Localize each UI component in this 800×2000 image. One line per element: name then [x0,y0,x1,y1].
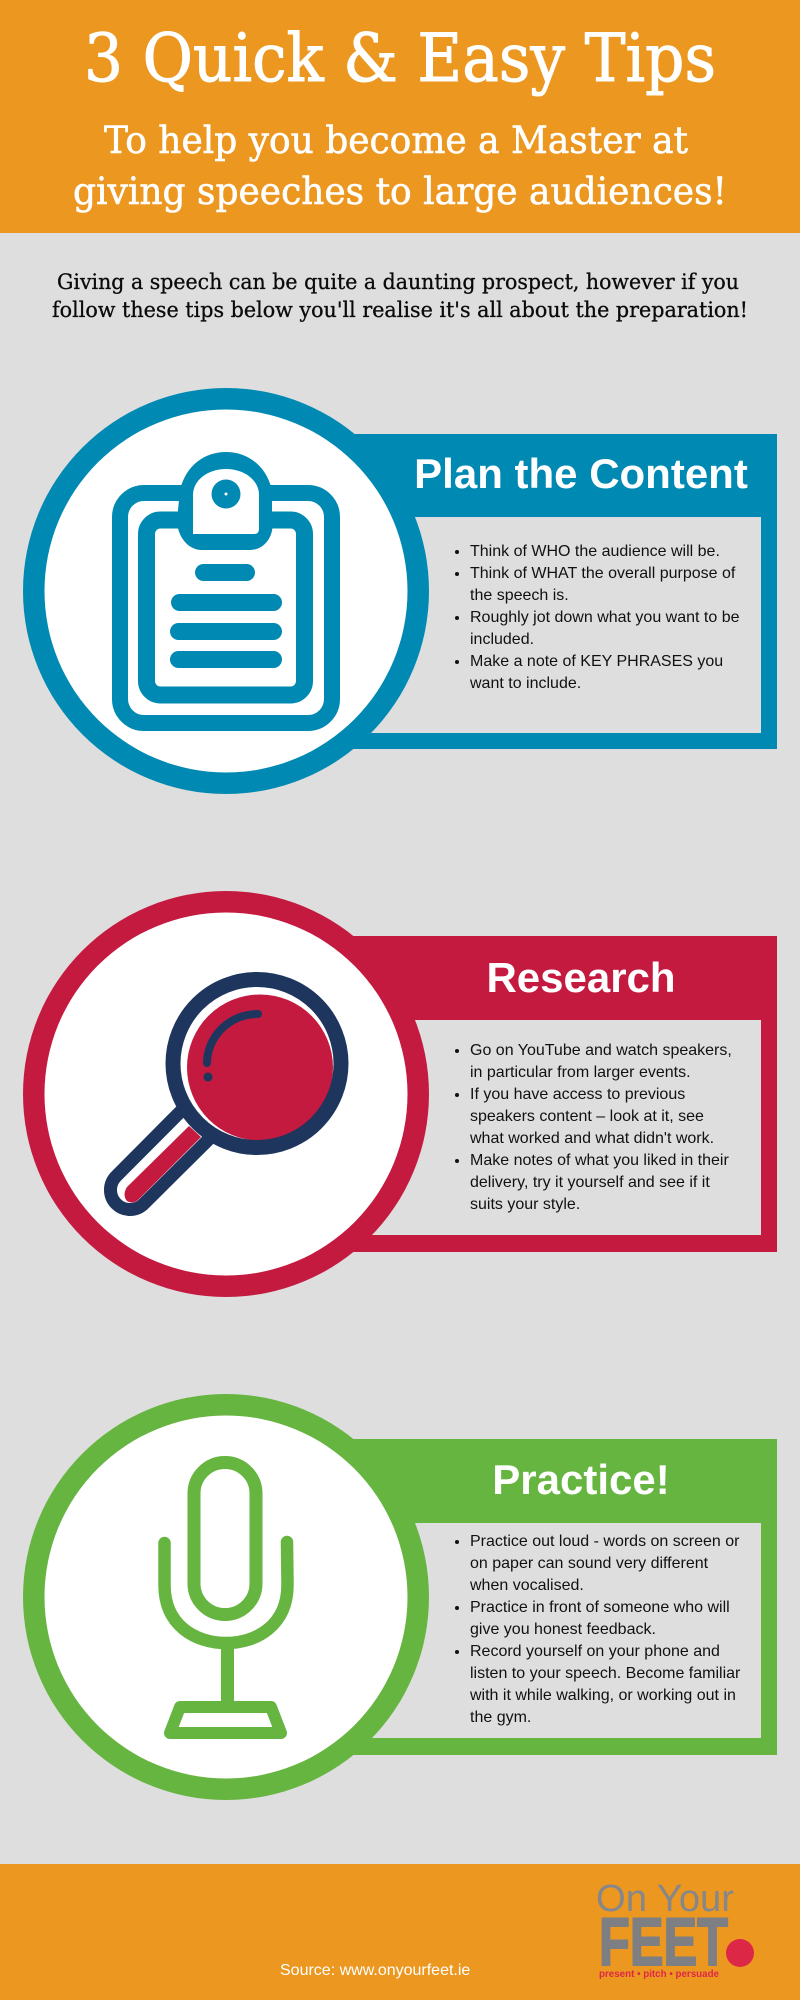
tips list: research: suits your style. [470,1196,580,1213]
panel: research [23,891,777,1297]
tips list: research: Make notes of what you liked in their [470,1152,729,1169]
tips list: research: what worked and what didn't work. [470,1130,714,1147]
tips list: practice: listen to your speech. Become familiar [470,1665,740,1682]
tips list: plan the content: Roughly jot down what you want to be [470,609,740,626]
source credit: Source: www.onyourfeet.ie [280,1962,470,1979]
tips list: practice: on paper can sound very different [470,1555,708,1572]
tips list: practice: Practice in front of someone who will [470,1599,730,1616]
logo: on your feet: On Your [596,1878,734,1920]
intro text [52,270,748,322]
tips list: plan the content: want to include. [470,675,581,692]
subtitle: giving speeches to large audiences! [73,170,727,213]
footer band [0,1864,800,2000]
tips list: research: If you have access to previous [470,1086,685,1103]
icon: magnifying glass [110,980,341,1210]
heading: research: Research [486,954,676,1001]
tips list: plan the content [455,543,740,692]
icon: microphone [164,1462,288,1733]
tips list: plan the content: Think of WHAT the overall purpose of [470,565,735,582]
tips list: research: Go on YouTube and watch speakers, [470,1042,732,1059]
logo: on your feet: present • pitch • persuade [599,1969,719,1980]
subtitle [73,119,727,213]
tips list: practice [455,1533,740,1726]
tips list: practice: with it while walking, or working out in [470,1687,736,1704]
icon: clipboard [120,452,332,723]
tips list: plan the content: the speech is. [470,587,569,604]
tips list: plan the content: included. [470,631,534,648]
panel: practice [23,1394,777,1800]
tips list: practice: the gym. [470,1709,531,1726]
panel frame [340,1439,777,1755]
heading: practice: Practice! [492,1456,670,1503]
intro text: Giving a speech can be quite a daunting prospect, however if you [57,270,739,294]
circle badge [23,891,429,1297]
panel frame [340,936,777,1252]
tips list: research: delivery, try it yourself and see if it [470,1174,710,1191]
subtitle: To help you become a Master at [104,119,688,162]
tips list: practice: give you honest feedback. [470,1621,656,1638]
title: 3 Quick & Easy Tips [84,20,716,97]
tips list: research [455,1042,732,1213]
tips list: practice: Practice out loud - words on screen or [470,1533,739,1550]
tips list: practice: Record yourself on your phone and [470,1643,720,1660]
tips list: research: speakers content – look at it, see [470,1108,704,1125]
circle badge [23,1394,429,1800]
panel: plan the content [23,388,777,794]
tips list: plan the content: Make a note of KEY PHRASES you [470,653,723,670]
header banner [0,0,800,233]
intro text: follow these tips below you'll realise it's all about the preparation! [52,298,748,322]
heading: plan the content: Plan the Content [414,450,748,497]
tips list: research: in particular from larger events. [470,1064,691,1081]
circle badge [23,388,429,794]
panel frame [340,434,777,749]
tips list: practice: when vocalised. [470,1577,584,1594]
tips list: plan the content: Think of WHO the audience will be. [470,543,720,560]
